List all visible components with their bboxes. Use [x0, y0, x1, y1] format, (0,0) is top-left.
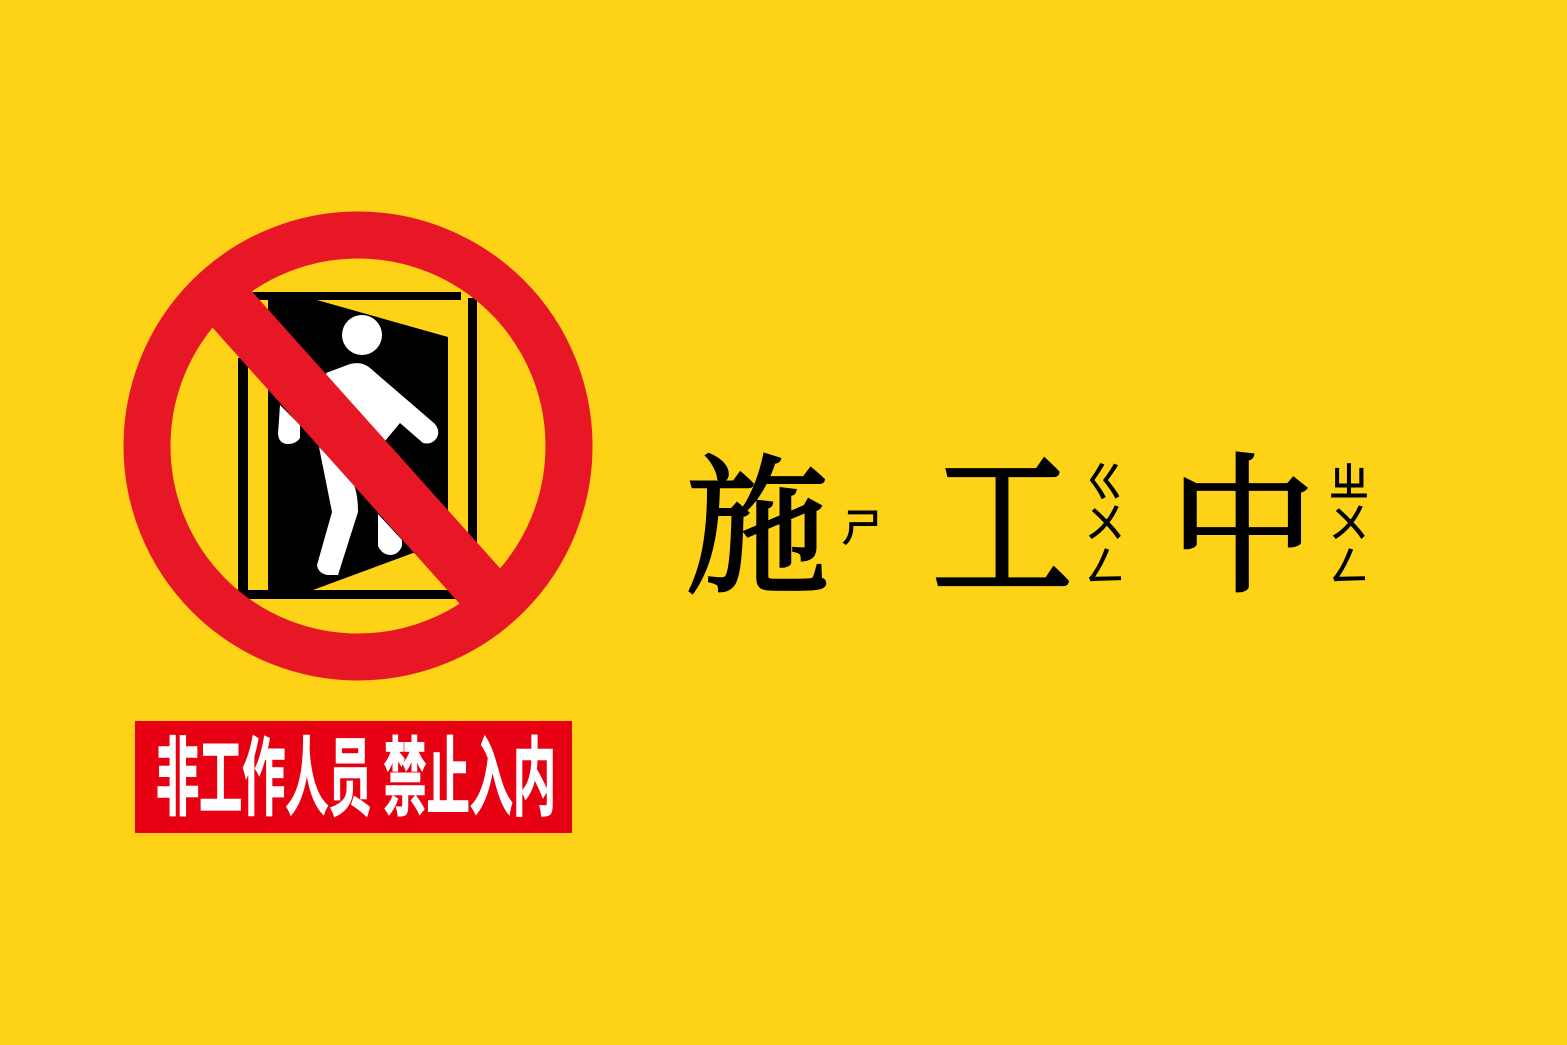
- title character: shi: 施: [686, 447, 828, 613]
- icon: walking person: [278, 315, 438, 575]
- bopomofo: gong: ㄥ: [1085, 545, 1125, 589]
- icon: no entry sign: [147, 235, 569, 657]
- bopomofo: gong: ㄍ: [1085, 461, 1125, 505]
- bopomofo: zhong: ㄓ: [1329, 461, 1369, 505]
- icon: open door: [268, 298, 448, 590]
- title with bopomofo: [686, 438, 1369, 622]
- icon: red prohibition ring: [147, 235, 569, 657]
- bopomofo: shi: ㄕ: [842, 506, 882, 550]
- bopomofo: gong: ㄨ: [1085, 502, 1125, 546]
- bopomofo: gong: [1085, 461, 1125, 589]
- title character: gong: 工: [932, 438, 1073, 622]
- warning banner: [135, 721, 572, 833]
- bopomofo: zhong: [1329, 461, 1369, 589]
- bopomofo: zhong: ㄨ: [1329, 502, 1369, 546]
- banner text: 非工作人员 禁止入内: [156, 732, 556, 827]
- icon: red prohibition slash: [195, 267, 515, 621]
- title character: zhong: 中: [1170, 445, 1315, 611]
- bopomofo: zhong: ㄥ: [1329, 545, 1369, 589]
- icon: door frame: [238, 292, 477, 599]
